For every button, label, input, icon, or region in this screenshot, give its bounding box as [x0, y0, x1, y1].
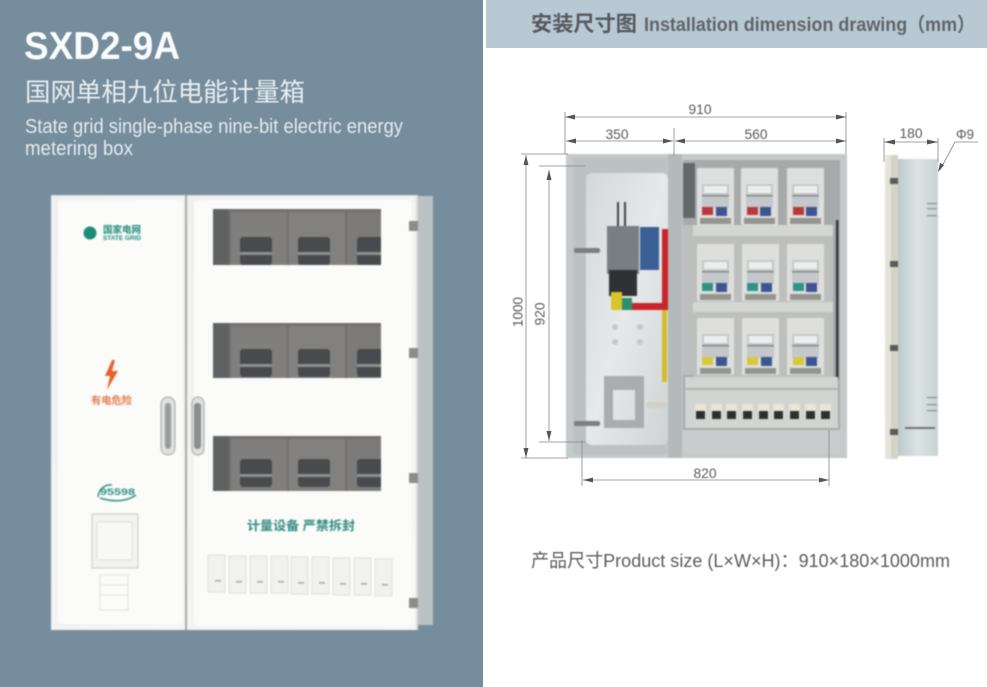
English product name: State grid single-phase nine-bit electric energy: [25, 116, 403, 138]
product size caption: 产品尺寸Product size (L×W×H)：910×180×1000mm: [531, 550, 950, 571]
service hotline logo: 95598: [100, 487, 135, 497]
breaker handles: [617, 202, 619, 226]
dimension arrowheads: front view: [524, 114, 846, 482]
English product name: [25, 116, 403, 160]
dimension labels: front view: 1000: [510, 297, 526, 327]
warning: metering equipment: 计量设备 严禁拆封: [247, 518, 356, 533]
meter row 1: [697, 168, 824, 225]
section heading: Chinese: 安装尺寸图: [531, 13, 637, 36]
State Grid logo: 国家电网: [103, 224, 141, 236]
meter screens: [240, 237, 389, 487]
English product name: metering box: [25, 138, 133, 160]
meter window 2: [213, 323, 381, 379]
left panel background: [0, 0, 483, 687]
hinges: [409, 221, 418, 608]
bracket: [604, 376, 644, 428]
dimension labels: front view: 820: [694, 466, 716, 481]
dimension labels: front view: 910: [688, 102, 712, 117]
meter window 1: [213, 209, 381, 265]
meter window 3: [213, 436, 381, 492]
dimension: side view: [884, 126, 978, 172]
dimension lines: front view: [521, 112, 846, 486]
dimension: side view: Φ9: [956, 127, 974, 142]
front view: open box: [566, 154, 847, 458]
breaker covers: [208, 555, 392, 596]
inspection window: [92, 514, 138, 568]
State Grid logo: STATE GRID: [103, 236, 142, 242]
dimension labels: front view: 920: [532, 302, 548, 326]
left door: [51, 196, 185, 630]
back box edge: [416, 196, 433, 625]
main breaker: [607, 226, 639, 274]
left door interior: [573, 158, 668, 455]
meter row 2: [697, 244, 824, 301]
service hotline logo: [98, 485, 136, 501]
mounting holes: [612, 324, 643, 345]
product title: SXD2-9A: [24, 25, 180, 68]
dimension: side view: 180: [900, 126, 922, 141]
dimension labels: front view: [510, 102, 768, 481]
electric hazard label: 有电危险: [91, 394, 132, 407]
dimension labels: front view: 350: [606, 127, 628, 142]
meter row 3: [697, 318, 824, 375]
dimension labels: front view: 560: [744, 127, 768, 142]
terminal block: [640, 227, 659, 270]
State Grid logo: [84, 224, 142, 242]
branch breaker strip: [685, 377, 838, 428]
product photo: closed metering box: [51, 195, 433, 630]
right header band: [486, 0, 987, 48]
handle: right door: [192, 397, 204, 455]
side view of box: [885, 155, 938, 459]
cover overflow right of windows: [381, 205, 411, 505]
right door: [187, 196, 416, 630]
handle: left door: [161, 397, 175, 455]
icon: lightning bolt: [105, 360, 118, 390]
Chinese product name: 国网单相九位电能计量箱: [25, 79, 305, 107]
vent grille: [100, 575, 128, 610]
right door interior: [683, 160, 840, 453]
busbars: [662, 229, 668, 309]
door seam: [185, 195, 187, 630]
centre hinge post: [668, 154, 682, 458]
